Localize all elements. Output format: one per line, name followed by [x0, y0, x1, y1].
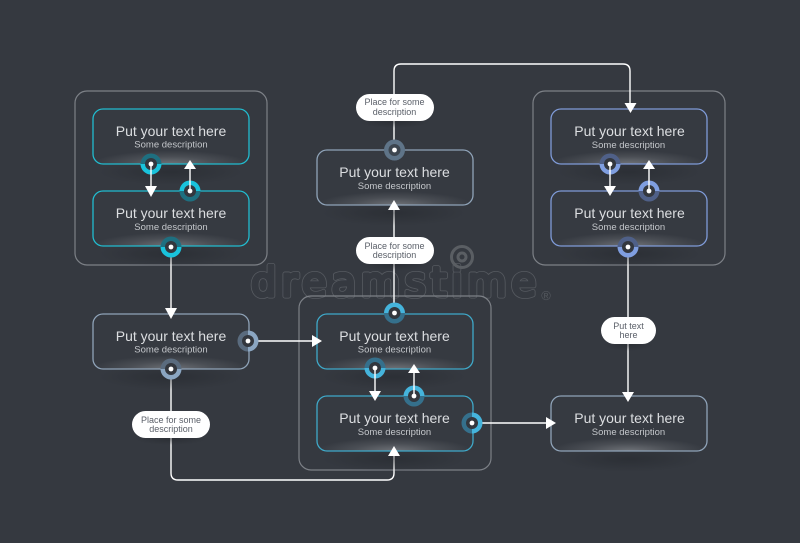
- arrowhead: into bottom right box: [546, 417, 556, 429]
- node: right group output: [618, 236, 638, 258]
- node: left box right: [238, 330, 258, 352]
- box: standalone left: Put your text here: [116, 328, 226, 344]
- pill: right label: Put text: [613, 321, 644, 331]
- box: right bottom: [551, 191, 707, 267]
- box: left top: [93, 109, 249, 185]
- arrowhead: into left box: [165, 308, 177, 319]
- box: standalone right: Some description: [592, 427, 665, 438]
- box: upper centre: [317, 150, 473, 226]
- pill: middle label: description: [373, 250, 416, 260]
- node and arrow: right pair down: [600, 154, 620, 196]
- panel: right group: [533, 91, 725, 265]
- box: left bottom: Some description: [134, 222, 208, 233]
- box: upper centre: Put your text here: [339, 164, 450, 180]
- pill: right label: [601, 317, 656, 351]
- pill: top label: Place for some: [364, 97, 425, 107]
- node: centre top input: [384, 302, 405, 324]
- arrowhead: into upper centre box: [388, 200, 400, 210]
- arrowhead: into standalone right box: [622, 392, 634, 402]
- box: right bottom: Put your text here: [574, 205, 685, 221]
- box: centre top: [317, 314, 473, 390]
- connector: right group to bottom right box: [627, 246, 629, 393]
- node: left box bottom: [160, 358, 182, 380]
- connector: bottom centre box to bottom right box: [472, 422, 547, 424]
- connector: centre box to upper box: [393, 209, 395, 313]
- box: centre bottom: Some description: [358, 427, 431, 438]
- pill: top label: [356, 94, 434, 128]
- box: left top: Some description: [134, 140, 208, 150]
- connector: left box to centre box: [248, 340, 313, 342]
- box: left top: Put your text here: [116, 123, 226, 139]
- box: right top: [551, 109, 707, 185]
- box: centre top: Some description: [358, 344, 431, 356]
- arrowhead: into centre top box: [312, 335, 322, 347]
- box: centre bottom: Put your text here: [339, 410, 450, 426]
- box: standalone right: Put your text here: [574, 410, 685, 426]
- watermark: ®: [541, 288, 551, 303]
- node and arrow: right pair up: [638, 160, 660, 202]
- box: left bottom: [93, 191, 249, 267]
- connector: left box to bottom centre box: [171, 369, 394, 480]
- pill: top label: description: [373, 107, 416, 117]
- box: upper centre: Some description: [358, 181, 431, 192]
- box: right top: Some description: [592, 140, 665, 151]
- box: left bottom: Put your text here: [116, 205, 226, 221]
- box: right bottom: Some description: [592, 222, 665, 233]
- node and arrow: left pair up: [180, 160, 200, 202]
- panel: left group: [75, 91, 267, 265]
- box: standalone left: [93, 314, 249, 390]
- box: centre bottom: [317, 396, 473, 472]
- pill: lower left label: Place for some: [141, 415, 201, 425]
- panel: centre group: [299, 296, 491, 470]
- node: upper centre top: [384, 140, 405, 160]
- node: left group output: [160, 236, 182, 258]
- node: centre bottom output: [462, 412, 482, 434]
- box: centre top: Put your text here: [339, 328, 450, 344]
- pill: lower left label: description: [149, 424, 193, 434]
- node and arrow: centre pair down: [364, 358, 386, 401]
- pill: lower left label: [132, 411, 210, 445]
- arrowhead: into centre bottom box: [388, 446, 400, 456]
- watermark: dreamstime: [251, 260, 536, 306]
- pill: middle label: Place for some: [364, 241, 425, 251]
- pill: middle label: [356, 237, 434, 271]
- connector: upper box to right group: [394, 64, 630, 150]
- connector: left group to left box: [170, 246, 172, 310]
- watermark: dreamstime: [251, 260, 536, 306]
- box: standalone right: [551, 396, 707, 472]
- box: standalone left: Some description: [134, 344, 208, 356]
- arrowhead: into right group: [624, 103, 636, 113]
- node and arrow: left pair down: [140, 154, 162, 197]
- pill: right label: here: [619, 330, 638, 340]
- node and arrow: centre pair up: [404, 364, 424, 406]
- box: right top: Put your text here: [574, 123, 685, 139]
